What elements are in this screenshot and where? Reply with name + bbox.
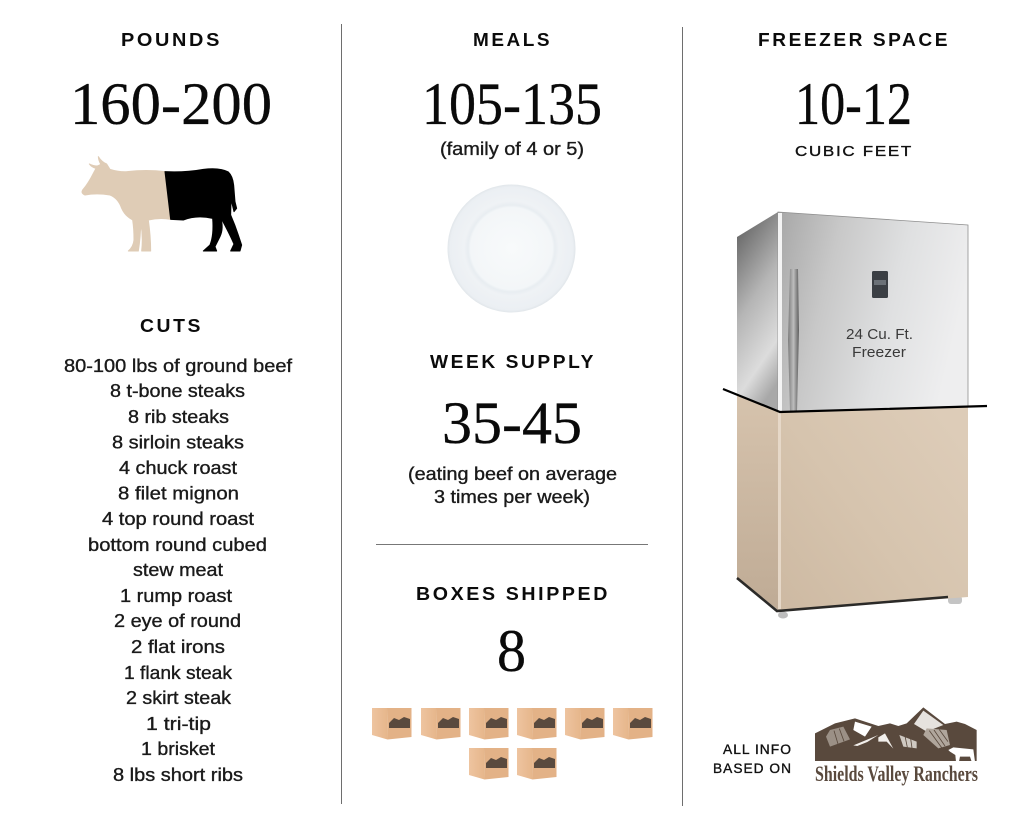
list: cuts of beef: 1 tri-tip <box>146 714 211 734</box>
number: week supply: 35-45 <box>442 390 582 456</box>
list: cuts of beef: 8 filet mignon <box>118 484 239 504</box>
lower beige section <box>737 395 778 610</box>
note: family size: (family of 4 or 5) <box>440 139 584 159</box>
list: cuts of beef <box>64 356 293 785</box>
door handle <box>788 269 799 412</box>
icon group: eight cardboard boxes <box>372 708 652 780</box>
column divider left <box>340 24 342 804</box>
number: boxes: 8 <box>497 618 526 684</box>
icon: cow with shaded half <box>82 157 242 251</box>
icon: white plate <box>448 184 576 312</box>
list: cuts of beef: 2 skirt steak <box>126 688 232 708</box>
list: cuts of beef: 1 flank steak <box>124 663 233 683</box>
label: freezer capacity: Freezer <box>852 345 906 361</box>
silver door <box>778 212 968 412</box>
number: cubic feet: 10-12 <box>795 71 912 137</box>
control panel <box>872 271 888 298</box>
list: cuts of beef: 2 eye of round <box>114 611 241 631</box>
heading: boxes shipped: BOXES SHIPPED <box>416 584 610 604</box>
heading: freezer space: FREEZER SPACE <box>758 30 950 50</box>
heading: meals: MEALS <box>473 30 552 50</box>
credit text <box>713 742 792 776</box>
list: cuts of beef: 4 chuck roast <box>119 458 237 478</box>
column divider right <box>682 27 684 806</box>
list: cuts of beef: 1 brisket <box>141 739 215 759</box>
logo: Shields Valley Ranchers <box>815 707 978 786</box>
note: eating frequency <box>408 464 617 507</box>
number: meals: 105-135 <box>422 71 602 137</box>
heading: cuts: CUTS <box>140 316 203 336</box>
heading: week supply: WEEK SUPPLY <box>430 352 596 372</box>
list: cuts of beef: 8 lbs short ribs <box>113 765 243 785</box>
list: cuts of beef: 8 t-bone steaks <box>110 381 245 401</box>
list: cuts of beef: stew meat <box>133 560 223 580</box>
list: cuts of beef: 2 flat irons <box>131 637 225 657</box>
list: cuts of beef: 1 rump roast <box>120 586 232 606</box>
panel: freezer space <box>713 30 987 786</box>
heading: pounds: POUNDS <box>121 30 222 50</box>
panel: meals, week supply, boxes <box>372 30 652 780</box>
subheading: cubic feet: CUBIC FEET <box>795 143 913 160</box>
number: pounds: 160-200 <box>70 71 272 137</box>
note: eating frequency: 3 times per week) <box>434 487 590 507</box>
base strip <box>737 578 948 611</box>
feet <box>778 612 788 618</box>
list: cuts of beef: bottom round cubed <box>88 535 267 555</box>
list: cuts of beef: 8 sirloin steaks <box>112 432 244 452</box>
illustration: freezer with fill level <box>723 212 987 618</box>
note: eating frequency: (eating beef on average <box>408 464 617 484</box>
list: cuts of beef: 4 top round roast <box>102 509 254 529</box>
list: cuts of beef: 8 rib steaks <box>128 407 229 427</box>
list: cuts of beef: 80-100 lbs of ground beef <box>64 356 293 376</box>
panel: pounds and cuts <box>64 30 293 785</box>
credit text: ALL INFO <box>723 742 792 757</box>
credit text: BASED ON <box>713 761 792 776</box>
fill level line <box>723 389 987 412</box>
label: freezer capacity <box>846 327 913 361</box>
label: freezer capacity: 24 Cu. Ft. <box>846 327 913 343</box>
silver side panel <box>737 212 778 412</box>
